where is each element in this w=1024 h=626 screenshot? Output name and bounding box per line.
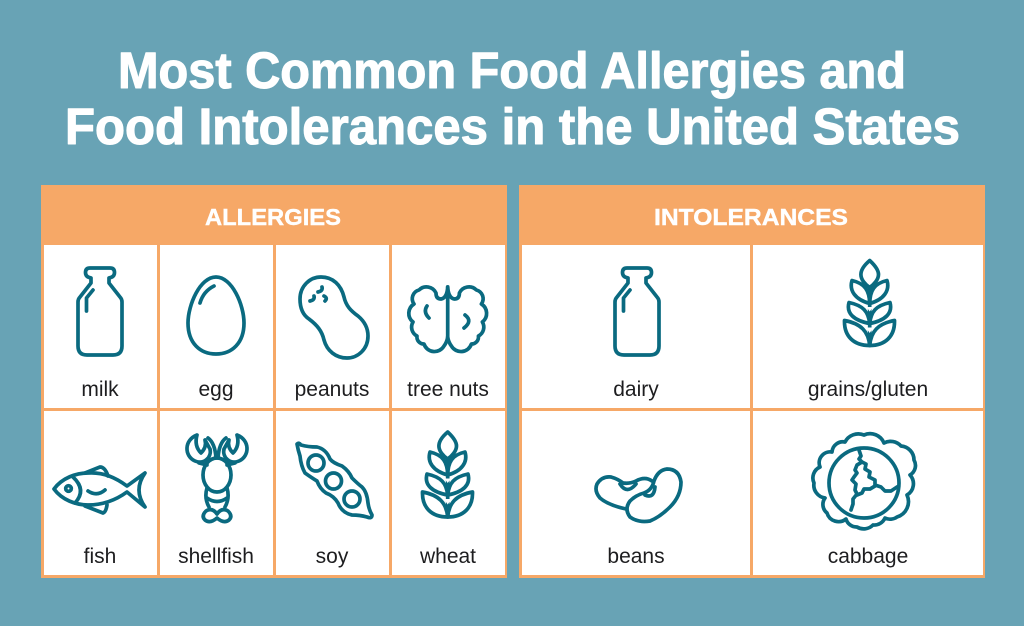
cell: milk [44, 245, 157, 408]
label: grains/gluten: grains/gluten [808, 378, 928, 401]
cell: wheat [392, 411, 505, 575]
icon: walnut [409, 287, 487, 352]
title: Most Common Food Allergies and [118, 42, 906, 99]
icon: beans [596, 469, 681, 522]
label: beans: beans [607, 545, 665, 568]
title: Food Intolerances in the United States [65, 98, 960, 155]
cell: cabbage [753, 411, 983, 575]
heading: intolerances: INTOLERANCES [654, 204, 848, 230]
title [65, 42, 960, 155]
label: shellfish: shellfish [178, 545, 254, 568]
label: cabbage: cabbage [828, 545, 908, 568]
label: soy: soy [316, 545, 349, 568]
label: dairy: dairy [613, 378, 659, 401]
icon: grain [844, 260, 895, 346]
label: egg: egg [198, 378, 234, 401]
cell: soy [276, 411, 389, 575]
label: fish: fish [84, 545, 116, 568]
cell: beans [522, 411, 750, 575]
label: peanuts: peanuts [295, 378, 369, 401]
icon: fish [54, 467, 145, 513]
cell: peanuts [276, 245, 389, 408]
icon: milk bottle [78, 268, 122, 355]
icon: soy pod [297, 443, 372, 518]
icon: egg [188, 277, 244, 354]
cell: dairy [522, 245, 750, 408]
panel: intolerances [519, 185, 985, 578]
icon: cabbage [813, 434, 915, 529]
cell: tree nuts [392, 245, 505, 408]
cell: shellfish [160, 411, 273, 575]
label: milk: milk [81, 378, 119, 401]
panel: allergies [41, 185, 507, 578]
cell: fish [44, 411, 157, 575]
icon: dairy bottle [615, 268, 659, 355]
icon: lobster [187, 435, 247, 522]
label: tree nuts: tree nuts [407, 378, 489, 401]
cell: grains/gluten [753, 245, 983, 408]
cell: egg [160, 245, 273, 408]
heading: allergies: ALLERGIES [205, 204, 341, 230]
label: wheat: wheat [419, 545, 476, 568]
icon: peanut [300, 277, 368, 358]
icon: wheat [422, 432, 473, 517]
